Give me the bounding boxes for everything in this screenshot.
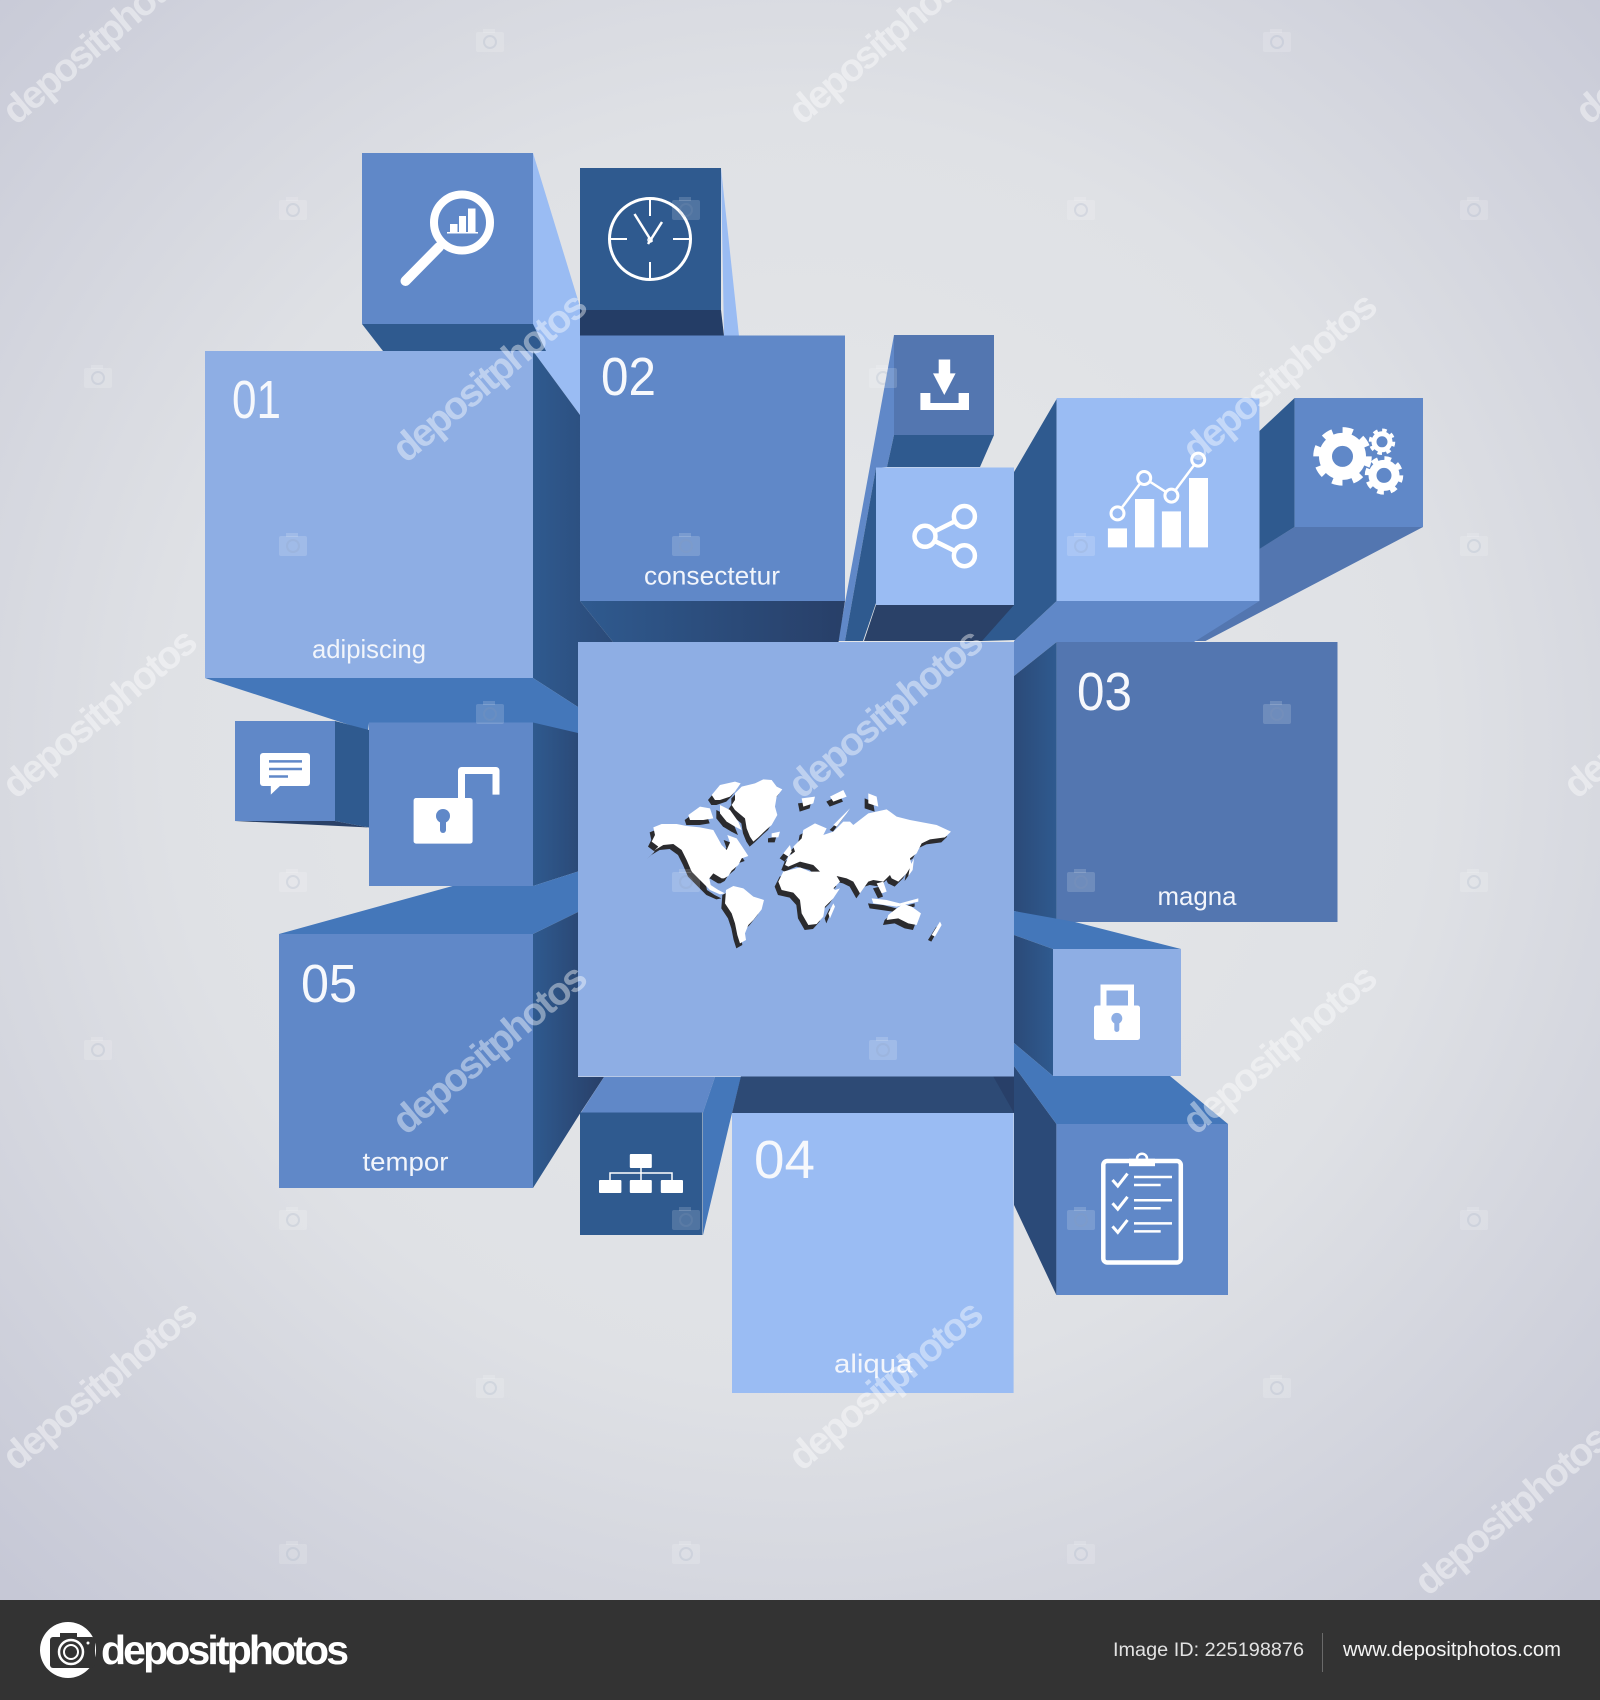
icon: clock [610,198,690,280]
icon: download [920,360,969,410]
panel: box 05 [279,872,604,1188]
icon: hierarchy [599,1154,683,1193]
watermark text: depositphotos [384,956,596,1143]
panel: clock cube [580,168,739,336]
panel: center world map box [578,642,1014,1076]
label magna: magna [1158,881,1237,911]
panel: box 02 [580,336,845,642]
website url: www.depositphotos.com [1342,1639,1561,1661]
panel: clipboard cube [1014,1043,1228,1295]
watermark text: depositphotos [384,284,596,471]
logo: camera badge [40,1622,96,1678]
logo wordmark: depositphotos [101,1627,349,1673]
label consectetur: consectetur [644,560,780,590]
panel: gears cube [1194,398,1423,641]
icon: magnifier with bars [406,194,490,281]
image id: Image ID: 225198876 [1113,1639,1304,1661]
watermark text: depositphotos [780,620,992,807]
icon: world map [647,779,951,948]
panel: magnifier cube [362,153,589,415]
number 03: 03 [1077,662,1132,722]
icon: gears [1316,430,1401,492]
label tempor: tempor [362,1146,449,1176]
panel: download cube [838,335,994,641]
number 05: 05 [301,954,357,1014]
number 02: 02 [601,347,656,407]
number 01: 01 [232,370,281,430]
watermark text: depositphotos [0,1292,206,1479]
icon: share [914,506,975,566]
panel: chart cube [982,398,1259,676]
panel: box 01 [205,351,613,735]
panel: lock cube [1014,911,1181,1076]
panel: unlock cube [369,722,578,886]
label adipiscing: adipiscing [312,634,426,664]
number 04: 04 [754,1130,815,1190]
footer bar [0,1600,1600,1700]
panel: box 03 [1014,642,1338,922]
icon: closed padlock [1094,988,1140,1040]
watermark camera marks [84,29,1488,1564]
watermark text: depositphotos [0,620,206,807]
icon: bar and line chart [1108,453,1208,547]
icon: checklist clipboard [1103,1154,1181,1262]
watermark text: depositphotos [1174,284,1386,471]
label aliqua: aliqua [834,1348,913,1378]
panel: box 04 [732,1076,1014,1393]
watermark text: depositphotos [780,1292,992,1479]
panel: chat cube [235,721,369,828]
watermark text: depositphotos [1174,956,1386,1143]
icon: open padlock [414,770,496,844]
icon: chat bubble [260,753,310,795]
panel: org chart cube [580,1077,741,1235]
panel: share cube [864,468,1014,641]
